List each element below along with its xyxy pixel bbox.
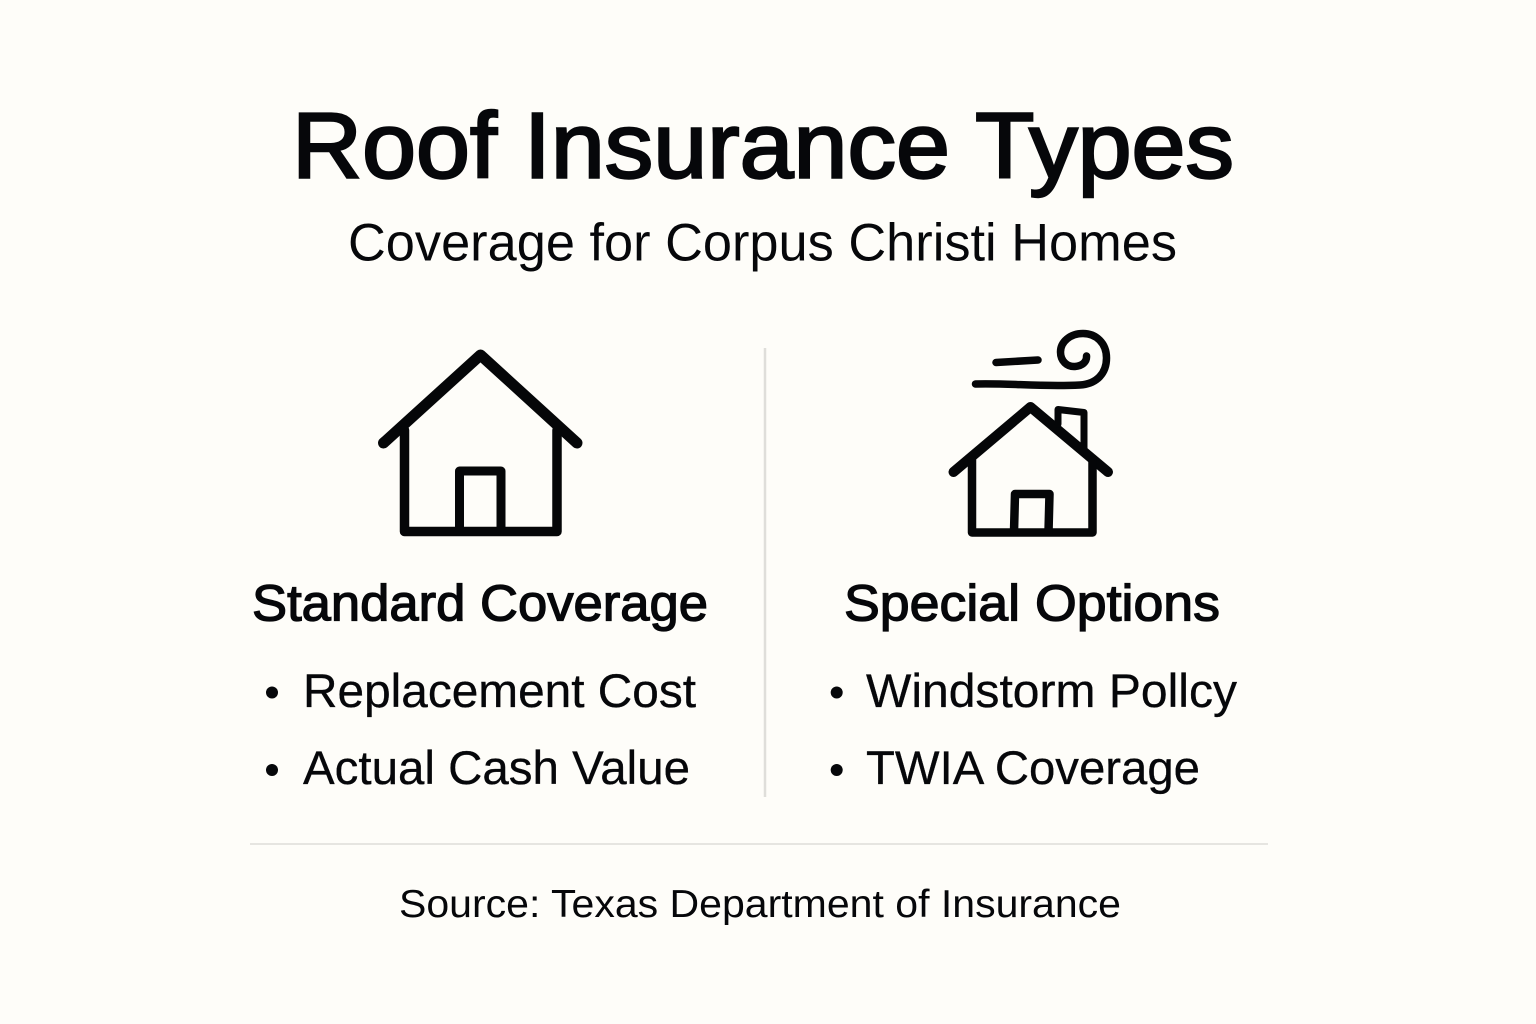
heading: standard coverage: Standard Coverage xyxy=(252,574,708,632)
panel: standard coverage xyxy=(252,355,708,794)
icon: house with wind and chimney xyxy=(954,334,1108,532)
title: Roof Insurance Types xyxy=(292,94,1234,198)
list: standard coverage: Replacement Cost xyxy=(303,664,696,717)
list: special options: TWIA Coverage xyxy=(866,741,1200,794)
list: standard coverage xyxy=(266,664,696,794)
list: standard coverage: Actual Cash Value xyxy=(303,741,690,794)
panel: special options xyxy=(831,334,1238,794)
list: special options: Windstorm Pollcy xyxy=(866,664,1238,717)
list: special options xyxy=(831,664,1238,794)
icon: house xyxy=(384,355,577,532)
heading: special options: Special Options xyxy=(844,574,1220,632)
subtitle: Coverage for Corpus Christi Homes xyxy=(348,214,1177,272)
source note: Source: Texas Department of Insurance xyxy=(399,883,1121,926)
